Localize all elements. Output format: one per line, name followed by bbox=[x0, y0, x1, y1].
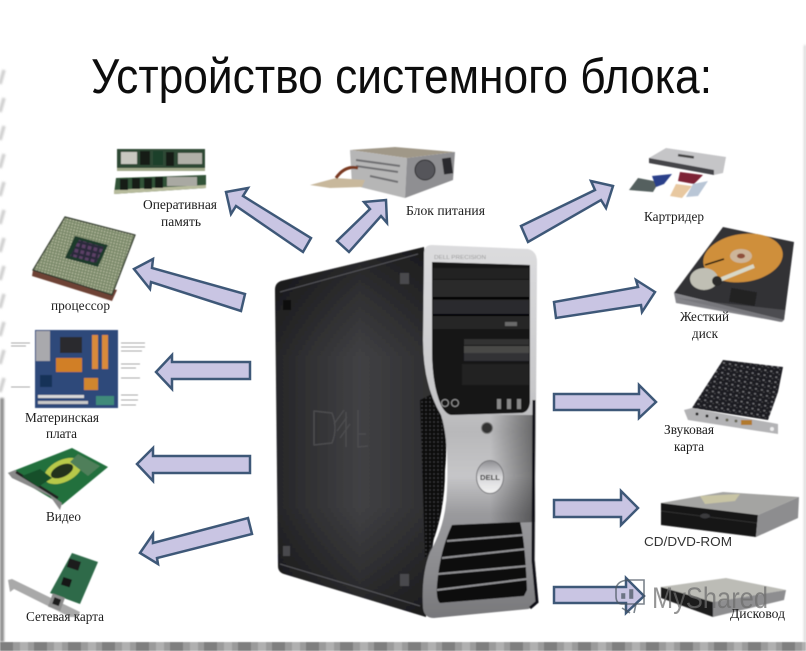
icon: network card bbox=[8, 553, 98, 617]
watermark bbox=[616, 580, 768, 615]
title: Устройство системного блока: bbox=[91, 50, 712, 104]
embossed side logo bbox=[314, 410, 368, 447]
label: CD/DVD-ROM: CD/DVD-ROM bbox=[644, 534, 732, 549]
label: hard disk: Жесткий bbox=[680, 309, 729, 324]
watermark text: MyShared bbox=[652, 582, 768, 615]
arrow: to RAM bbox=[226, 188, 311, 252]
silver front bezel bbox=[423, 245, 538, 618]
label: processor: процессор bbox=[51, 298, 110, 313]
Dell badge bbox=[476, 460, 504, 494]
power button bbox=[482, 422, 492, 434]
watermark icon bbox=[616, 580, 644, 613]
label: motherboard: плата bbox=[46, 426, 77, 441]
label: sound card: Звуковая bbox=[664, 422, 714, 437]
bezel model text: DELL PRECISION bbox=[434, 255, 486, 261]
icon: hard disk bbox=[674, 227, 794, 322]
arrow: to processor bbox=[134, 259, 245, 311]
icon: video card bbox=[8, 448, 108, 510]
arrow: to motherboard bbox=[156, 355, 250, 389]
arrow: to sound card bbox=[554, 385, 656, 418]
arrow: to floppy drive bbox=[554, 578, 644, 613]
arrow: to video card bbox=[137, 448, 250, 481]
drive bay panel bbox=[432, 262, 530, 415]
icon: power supply bbox=[310, 147, 455, 198]
computer tower bbox=[275, 245, 538, 618]
label: floppy drive: Дисковод bbox=[730, 606, 785, 621]
front grille bbox=[437, 522, 527, 603]
icon: motherboard bbox=[11, 330, 145, 408]
label: RAM: память bbox=[161, 214, 201, 229]
icon: floppy drive bbox=[661, 578, 786, 617]
icon: sound card bbox=[684, 360, 783, 434]
label: card reader: Картридер bbox=[644, 209, 704, 224]
label: RAM: Оперативная bbox=[143, 197, 217, 212]
mesh vent bbox=[420, 392, 446, 560]
arrow: to CD/DVD-ROM bbox=[554, 491, 638, 525]
arrow: to hard disk bbox=[554, 280, 655, 318]
label: motherboard: Материнская bbox=[25, 410, 99, 425]
arrow: to network card bbox=[140, 518, 252, 564]
tower side panel bbox=[275, 247, 445, 617]
icon: CD/DVD drive bbox=[661, 492, 799, 537]
label: sound card: карта bbox=[674, 439, 704, 454]
label: video: Видео bbox=[46, 509, 81, 524]
label: network card: Сетевая карта bbox=[26, 609, 104, 624]
arrow: to card reader bbox=[521, 181, 613, 242]
arrow: to power supply bbox=[337, 200, 387, 252]
Dell badge: DELL bbox=[480, 473, 500, 482]
icon: RAM modules bbox=[114, 149, 206, 194]
icon: card reader bbox=[629, 148, 726, 198]
icon: processor bbox=[32, 217, 135, 301]
label: power supply: Блок питания bbox=[406, 203, 485, 218]
label: hard disk: диск bbox=[692, 326, 718, 341]
